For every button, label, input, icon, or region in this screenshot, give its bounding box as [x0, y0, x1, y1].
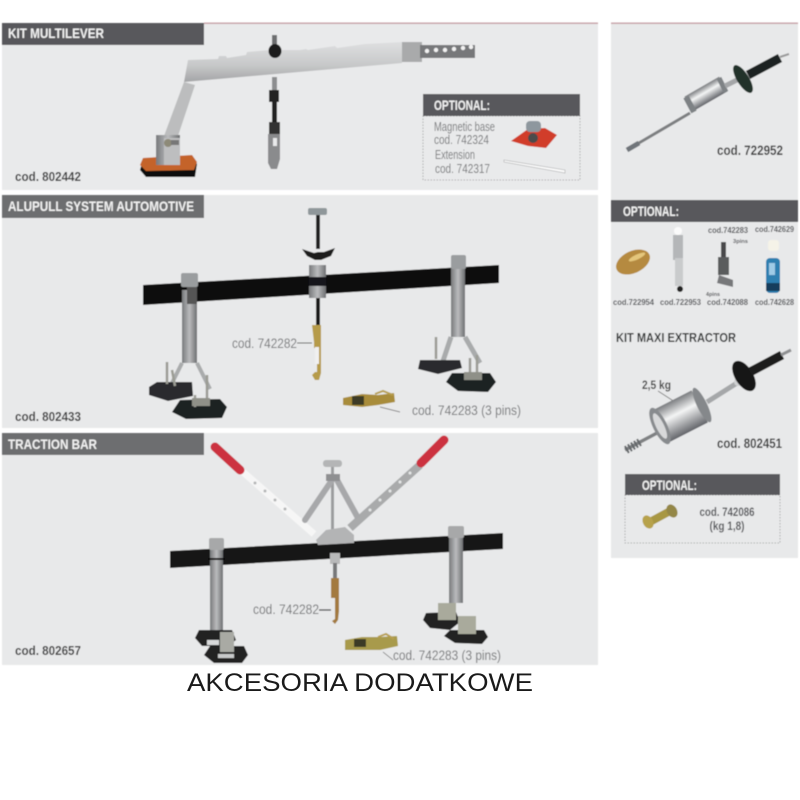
item: 742629 and 742628: cod.742628 [755, 298, 794, 307]
label: 742283: cod. 742283 (3 pins) [412, 402, 521, 418]
panel: kit maxi extractor [611, 315, 798, 558]
callout: optional extractor [625, 474, 780, 543]
heading: traction bar: TRACTION BAR [8, 436, 97, 452]
label: weight 2,5 kg: 2,5 kg [642, 378, 671, 392]
panel: traction bar [2, 433, 598, 665]
icon: 3-pin clip [345, 634, 398, 660]
item: 742629 and 742628 [755, 225, 794, 307]
icon: slide hammer 722952 [627, 54, 789, 150]
item: 742283 and 742088: 4pins [706, 292, 720, 298]
icon: maxi extractor [625, 350, 791, 450]
panel: slide hammer and optional accessories [611, 22, 798, 315]
item: 742629 and 742628: cod.742629 [755, 225, 794, 234]
callout: optional extractor: cod. 742086 [700, 505, 755, 519]
item: 722954: cod.722954 [613, 298, 655, 307]
item: 742283 and 742088: cod.742283 [708, 226, 749, 235]
icon: brass weight [640, 502, 680, 531]
icon: alupull bar assembly [143, 208, 499, 419]
icon: traction bar assembly [170, 440, 503, 663]
title: AKCESORIA DODATKOWE [187, 669, 533, 697]
callout: optional multilever: OPTIONAL: [434, 97, 490, 113]
heading: optional: OPTIONAL: [623, 203, 679, 219]
item: 722953 [660, 227, 702, 307]
code: 802442: cod. 802442 [15, 169, 81, 184]
heading: alupull [2, 195, 204, 218]
label: 742283: cod. 742283 (3 pins) [393, 647, 501, 663]
callout: optional multilever: Magnetic base [434, 119, 495, 134]
label: weight 2,5 kg [642, 378, 675, 402]
callout: optional extractor: (kg 1,8) [710, 519, 744, 533]
item: 742283 and 742088: 3pins [733, 239, 748, 245]
callout: optional multilever: Extension [435, 147, 475, 162]
heading: traction bar [2, 433, 204, 455]
item: 742283 and 742088 [706, 226, 749, 307]
code: 722952: cod. 722952 [717, 142, 783, 158]
callout: optional multilever [423, 94, 580, 180]
callout: optional multilever: cod. 742317 [435, 161, 490, 176]
heading: alupull: ALUPULL SYSTEM AUTOMOTIVE [8, 198, 194, 214]
heading: kit maxi extractor: KIT MAXI EXTRACTOR [616, 330, 737, 345]
callout: optional multilever: cod. 742324 [434, 132, 489, 147]
heading: kit multilever: KIT MULTILEVER [8, 25, 104, 41]
panel: alupull system automotive [2, 195, 598, 428]
panel: kit multilever [2, 22, 598, 190]
icon: 3-pin clip [343, 391, 400, 412]
heading: kit multilever [2, 23, 204, 45]
item: 722954 [612, 244, 655, 307]
callout: optional extractor: OPTIONAL: [642, 477, 697, 493]
label: 742282: cod. 742282 [232, 335, 297, 351]
code: 802433: cod. 802433 [15, 409, 81, 424]
icon: multilever tool [140, 35, 475, 177]
item: 722953: cod.722953 [660, 298, 702, 307]
icon: extension [504, 160, 565, 173]
label: 742282: cod. 742282 [253, 601, 319, 617]
code: 802451: cod. 802451 [717, 435, 782, 451]
code: 802657: cod. 802657 [15, 643, 81, 658]
item: 742283 and 742088: cod.742088 [707, 298, 749, 307]
heading: optional [611, 200, 798, 222]
icon: magnetic base [511, 121, 557, 148]
